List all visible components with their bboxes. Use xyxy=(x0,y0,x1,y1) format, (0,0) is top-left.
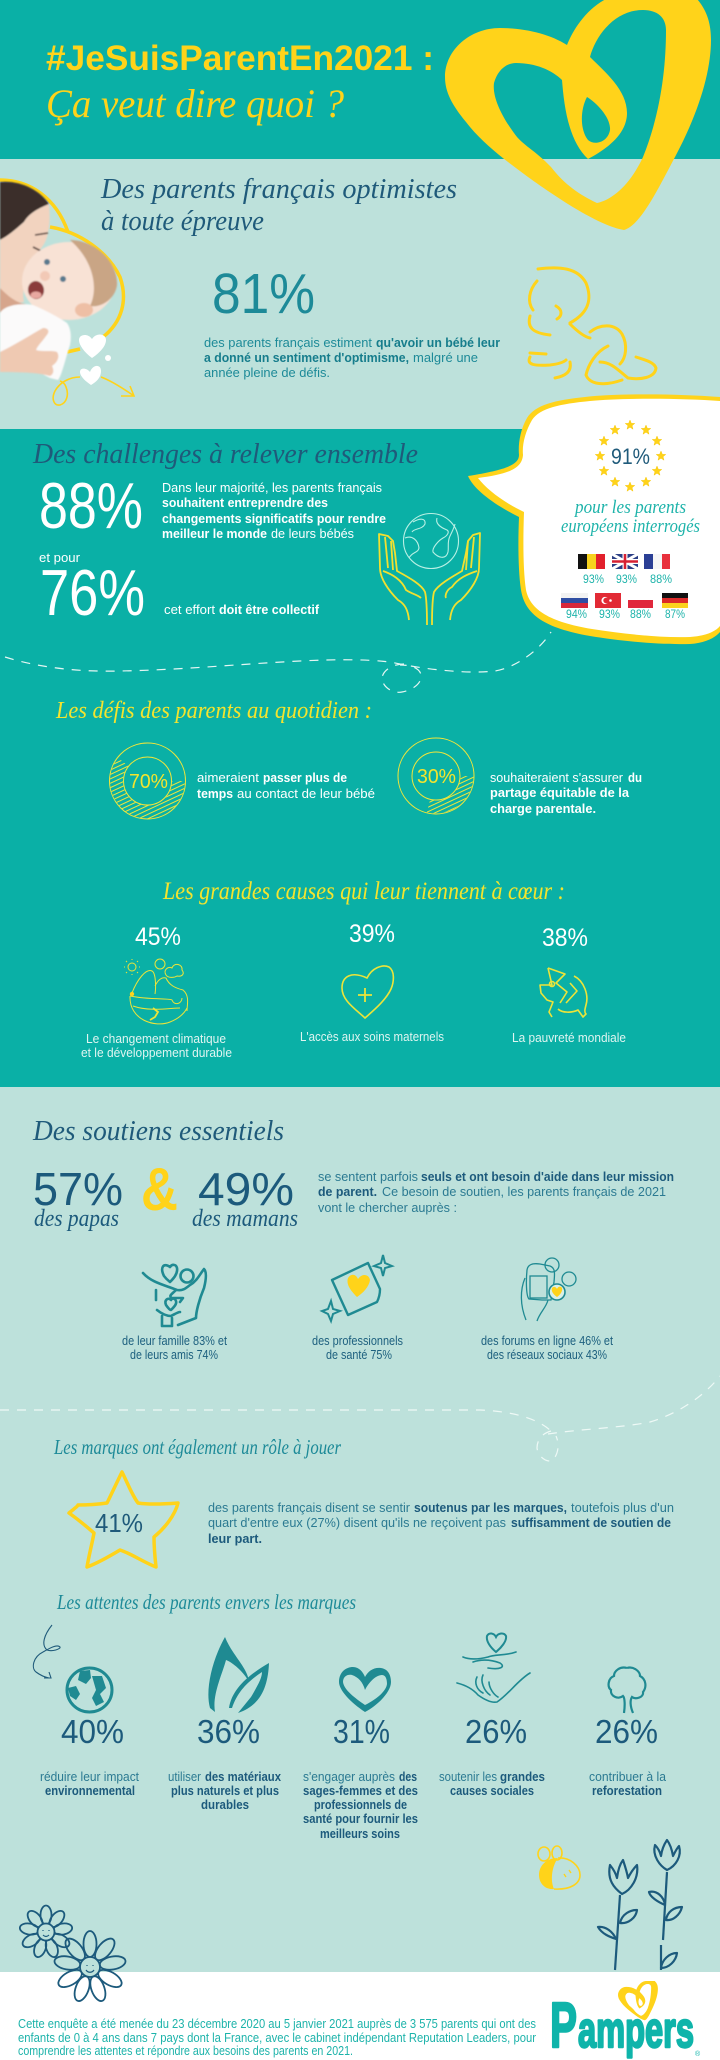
stat: 88%: 88% xyxy=(39,469,143,542)
text: equal sharing: du xyxy=(628,770,642,785)
heading: expectations: Les attentes des parents envers les marques xyxy=(56,1590,356,1614)
label: forums and social networks: des réseaux sociaux 43% xyxy=(487,1347,607,1362)
text: changes: de leurs bébés xyxy=(271,526,354,541)
label: midwives: professionnels de xyxy=(314,1797,407,1812)
flag: France xyxy=(644,554,670,569)
text: support need: de parent. xyxy=(318,1184,377,1199)
stat: 39% maternal care: 39% xyxy=(349,920,395,948)
text: support need: Ce besoin de soutien, les parents français de 2021 xyxy=(382,1184,666,1199)
title: #JeSuisParentEn2021 : xyxy=(46,39,434,78)
stat: 57% dads: 57% xyxy=(33,1163,123,1215)
icon: hands holding globe xyxy=(379,514,480,625)
text: collective effort: doit être collectif xyxy=(219,602,320,617)
icon: phone and social networks xyxy=(521,1258,576,1321)
label: social causes: grandes xyxy=(500,1769,545,1784)
stat: 45% climate: 45% xyxy=(135,923,181,951)
icon: crawling baby xyxy=(529,268,656,384)
flag: Turkey xyxy=(595,593,621,608)
stat: 81%: 81% xyxy=(212,262,315,326)
label: materials: plus naturels et plus xyxy=(171,1783,279,1798)
caption: pour les parents xyxy=(573,497,686,518)
text: optimism: malgré une xyxy=(413,350,478,365)
logo: Pampers: P xyxy=(550,1989,577,2060)
flag: Poland xyxy=(628,600,653,608)
logo: Pampers: ® xyxy=(695,2050,701,2058)
heading: Des challenges à relever ensemble xyxy=(32,438,418,470)
label: midwives: santé pour fournir les xyxy=(303,1811,418,1826)
stat: 41%: 41% xyxy=(95,1508,143,1538)
text: more time: temps xyxy=(197,786,233,801)
panel: optimistic parents xyxy=(0,159,720,429)
text: brand support: leur part. xyxy=(208,1531,262,1546)
panel: challenges xyxy=(0,429,720,1087)
icon: star xyxy=(69,1472,178,1567)
stat: 76%: 76% xyxy=(40,556,145,629)
heading: Des soutiens essentiels xyxy=(32,1115,284,1147)
flag: UK xyxy=(612,554,638,569)
label: 93% 93% 88%: 93% xyxy=(583,572,604,586)
chart: 70% donut xyxy=(110,743,186,819)
text: et pour: et pour xyxy=(39,550,81,565)
logo: Pampers xyxy=(550,1981,701,2060)
flag: Russia xyxy=(561,593,588,608)
label: materials: des matériaux xyxy=(205,1769,282,1784)
text: changes: changements significatifs pour rendre xyxy=(162,511,386,526)
logo: big Pampers heart xyxy=(445,0,711,230)
label: 93% 93% 88%: 88% xyxy=(650,572,672,586)
label: maternal care: L'accès aux soins maternels xyxy=(300,1029,444,1044)
label: family and friends: de leurs amis 74% xyxy=(130,1347,218,1362)
arrow: yellow loop xyxy=(53,377,134,405)
label: 94% 93% 88% 87%: 93% xyxy=(599,607,620,621)
stat: 91%: 91% xyxy=(611,444,650,469)
label: 94% 93% 88% 87%: 94% xyxy=(566,607,587,621)
text: survey note: enfants de 0 à 4 ans dans 7 pays dont la France, avec le cabinet indépendant Reputation Leaders, pour xyxy=(18,2031,536,2045)
label: health professionals: des professionnels xyxy=(312,1333,403,1348)
text: changes: souhaitent entreprendre des xyxy=(162,495,328,510)
label: environment: environnemental xyxy=(45,1783,135,1798)
label: midwives: des xyxy=(399,1769,417,1784)
label: forums and social networks: des forums en ligne 46% et xyxy=(481,1333,613,1348)
label: family and friends: de leur famille 83% et xyxy=(122,1333,227,1348)
dashed flight path xyxy=(5,632,551,692)
chart: 30% donut xyxy=(398,738,474,814)
label: reforestation: contribuer à la xyxy=(589,1769,667,1784)
label: health professionals: de santé 75% xyxy=(326,1347,392,1362)
text: survey note: comprendre les attentes et répondre aux besoins des parents en 2021. xyxy=(18,2044,353,2058)
text: equal sharing: souhaiteraient s'assurer xyxy=(490,770,624,785)
stat: 31%: 31% xyxy=(333,1713,390,1750)
icon: health document xyxy=(322,1255,392,1321)
text: brand support: suffisamment de soutien de xyxy=(511,1515,671,1530)
icon: tree xyxy=(609,1668,645,1713)
stat: 49% moms xyxy=(192,1163,298,1232)
speech bubble: European parents xyxy=(468,394,720,644)
icon: hands and heart xyxy=(457,1633,530,1702)
icon: climate earth xyxy=(124,959,188,1024)
panel: essential support xyxy=(0,1087,720,1972)
text: changes: meilleur le monde xyxy=(162,526,267,541)
label: materials: durables xyxy=(201,1797,249,1812)
heading: causes: Les grandes causes qui leur tiennent à cœur : xyxy=(162,878,565,905)
icon: white hearts xyxy=(79,335,111,385)
text: more time: passer plus de xyxy=(263,770,347,785)
text: more time: aimeraient xyxy=(197,770,259,785)
flag: Belgium xyxy=(578,554,605,569)
label: midwives: sages-femmes et des xyxy=(303,1783,418,1798)
text: optimism: qu'avoir un bébé leur xyxy=(376,335,500,350)
stat: 57% dads: des papas xyxy=(34,1206,119,1232)
label: social causes: causes sociales xyxy=(450,1783,534,1798)
icon: family xyxy=(143,1265,206,1326)
heading: à toute épreuve xyxy=(101,205,264,237)
text: brand support: soutenus par les marques, xyxy=(414,1500,567,1515)
label: environment: réduire leur impact xyxy=(40,1769,139,1784)
label: poverty: La pauvreté mondiale xyxy=(512,1030,626,1045)
heading: daily challenges: Les défis des parents au quotidien : xyxy=(55,698,372,724)
text: support need: vont le chercher auprès : xyxy=(318,1200,457,1215)
panel: footer xyxy=(0,1972,720,2060)
stat: 36%: 36% xyxy=(197,1713,260,1750)
icon: daisies xyxy=(19,1906,127,2003)
text: brand support: toutefois plus d'un xyxy=(571,1500,674,1515)
stat: 26% reforestation: 26% xyxy=(595,1713,658,1750)
label: climate: et le développement durable xyxy=(81,1045,232,1060)
icon: leaves xyxy=(208,1637,269,1713)
label: materials: utiliser xyxy=(168,1769,202,1784)
text: optimism: année pleine de défis. xyxy=(204,365,330,380)
text: brand support: quart d'entre eux (27%) disent qu'ils ne reçoivent pas xyxy=(208,1515,506,1530)
stat: 49% moms: des mamans xyxy=(192,1206,298,1232)
subtitle: Ça veut dire quoi ? xyxy=(46,81,344,126)
photo: mother and baby xyxy=(0,180,123,380)
dashed flight path xyxy=(0,1376,720,1461)
ring of stars xyxy=(595,420,666,491)
ampersand: & xyxy=(141,1156,178,1223)
icon: earth xyxy=(67,1668,112,1712)
chart: 70% donut: 70% xyxy=(129,771,168,793)
text: optimism: a donné un sentiment d'optimisme, xyxy=(204,350,409,365)
text: collective effort: cet effort xyxy=(164,602,215,617)
label: midwives: s'engager auprès xyxy=(303,1769,395,1784)
text: more time: au contact de leur bébé xyxy=(237,786,375,801)
text: brand support: des parents français disent se sentir xyxy=(208,1500,411,1515)
chart: 30% donut: 30% xyxy=(417,766,456,788)
stat: 38% poverty: 38% xyxy=(542,924,588,952)
label: reforestation: reforestation xyxy=(592,1783,662,1798)
stat: 49% moms: 49% xyxy=(198,1163,294,1215)
heading: brands: Les marques ont également un rôle à jouer xyxy=(53,1435,342,1459)
icon: piggy bank xyxy=(540,968,587,1017)
icon: heart plus xyxy=(342,966,393,1018)
label: 94% 93% 88% 87%: 88% xyxy=(630,607,651,621)
text: support need: seuls et ont besoin d'aide dans leur mission xyxy=(421,1169,674,1184)
text: equal sharing: charge parentale. xyxy=(490,801,596,816)
stat: 40%: 40% xyxy=(61,1713,124,1750)
text: optimism: des parents français estiment xyxy=(204,335,372,350)
flag: Germany xyxy=(662,593,688,608)
stat: 26% social causes: 26% xyxy=(465,1713,527,1750)
text: changes: Dans leur majorité, les parents français xyxy=(162,480,382,495)
text: support need: se sentent parfois xyxy=(318,1169,418,1184)
panel: header xyxy=(0,0,720,159)
label: social causes: soutenir les xyxy=(439,1769,497,1784)
icon: tulips xyxy=(598,1840,682,1970)
text: equal sharing: partage équitable de la xyxy=(490,785,630,800)
label: climate: Le changement climatique xyxy=(86,1031,226,1046)
caption: européens interrogés xyxy=(561,516,700,537)
icon: bee xyxy=(538,1846,580,1889)
label: 94% 93% 88% 87%: 87% xyxy=(665,607,685,621)
icon: heart xyxy=(339,1667,391,1712)
heading: Des parents français optimistes xyxy=(100,173,457,205)
label: 93% 93% 88%: 93% xyxy=(616,572,637,586)
text: survey note: Cette enquête a été menée du 23 décembre 2020 au 5 janvier 2021 auprès de 3 575 parents qui ont des xyxy=(18,2017,536,2031)
label: midwives: meilleurs soins xyxy=(320,1826,400,1841)
arrow: curly xyxy=(33,1625,60,1678)
